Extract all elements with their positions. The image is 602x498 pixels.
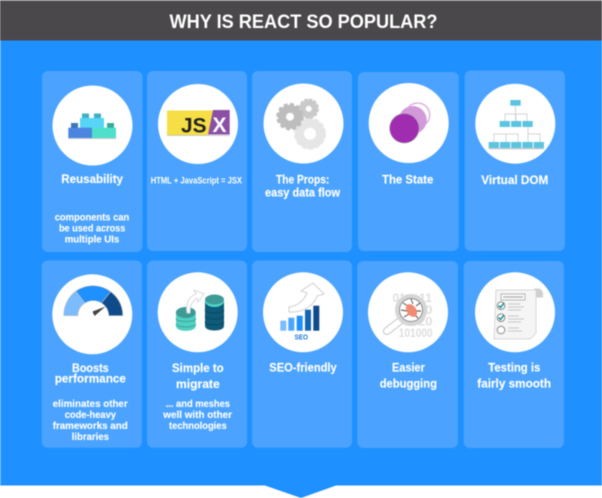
panel: JSX — [147, 71, 247, 251]
icon: speedometer gauge — [64, 286, 123, 316]
heading: performance — [55, 372, 126, 386]
description: components can — [55, 212, 129, 223]
icon: JSX logo — [167, 110, 230, 138]
panel: Reusability — [42, 71, 142, 252]
panel: Testing is fairly smooth — [464, 261, 564, 448]
heading: fairly smooth — [477, 376, 551, 390]
title: WHY IS REACT SO POPULAR? — [170, 11, 438, 33]
description: libraries — [72, 432, 109, 443]
heading: Testing is — [488, 360, 541, 374]
heading: Boosts — [72, 361, 109, 375]
panel: Simple to migrate — [147, 260, 247, 448]
description: multiple UIs — [65, 234, 120, 245]
icon: overlapping circles — [390, 103, 430, 143]
description — [53, 399, 128, 443]
description: technologies — [169, 421, 227, 432]
description: well with other — [162, 410, 232, 421]
heading: The Props: — [276, 173, 329, 187]
description — [55, 212, 129, 245]
icon: magnifier and bug: 20 — [418, 314, 433, 328]
heading: Virtual DOM — [481, 173, 548, 187]
icon: checklist — [494, 288, 543, 339]
panel: Boosts performance — [42, 260, 142, 448]
panel: The Props — [252, 71, 352, 252]
heading — [55, 361, 126, 386]
icon: rising bars — [280, 283, 324, 342]
icon: magnifier and bug: 01 — [392, 291, 406, 305]
icon: rising bars: SEO — [294, 332, 308, 342]
icon: building blocks — [68, 114, 116, 139]
heading: Easier — [392, 360, 425, 374]
heading: Reusability — [61, 172, 123, 186]
description — [162, 399, 232, 432]
icon: magnifier and bug — [387, 291, 433, 340]
heading: migrate — [176, 377, 220, 391]
panel: Easier debugging — [357, 261, 458, 448]
heading — [172, 361, 224, 391]
description: eliminates other — [53, 399, 128, 410]
description: code-heavy — [65, 410, 116, 421]
icon: JSX logo: X — [212, 114, 226, 137]
heading: debugging — [380, 376, 437, 390]
icon: magnifier and bug: 101000 — [399, 326, 433, 340]
icon: JSX logo: JS — [181, 114, 206, 138]
panel: Virtual DOM — [465, 70, 565, 251]
heading: HTML + JavaScript = JSX — [151, 175, 242, 185]
heading — [265, 173, 341, 199]
icon: database migration — [176, 290, 224, 331]
heading — [380, 360, 437, 390]
icon: node tree — [489, 100, 544, 149]
description: ... and meshes — [166, 399, 230, 410]
heading — [477, 360, 551, 390]
description: frameworks and — [53, 421, 128, 432]
heading: easy data flow — [265, 185, 341, 199]
heading: The State — [382, 173, 434, 187]
heading: Simple to — [172, 361, 224, 375]
panel: SEO-friendly — [252, 260, 352, 448]
icon: gears — [278, 100, 324, 148]
icon: magnifier and bug: 0 — [425, 303, 433, 317]
heading: SEO-friendly — [269, 360, 337, 374]
icon: magnifier and bug: 11 — [419, 291, 432, 305]
description: be used across — [59, 223, 126, 234]
panel: The State — [358, 72, 459, 251]
title bar — [0, 0, 602, 40]
